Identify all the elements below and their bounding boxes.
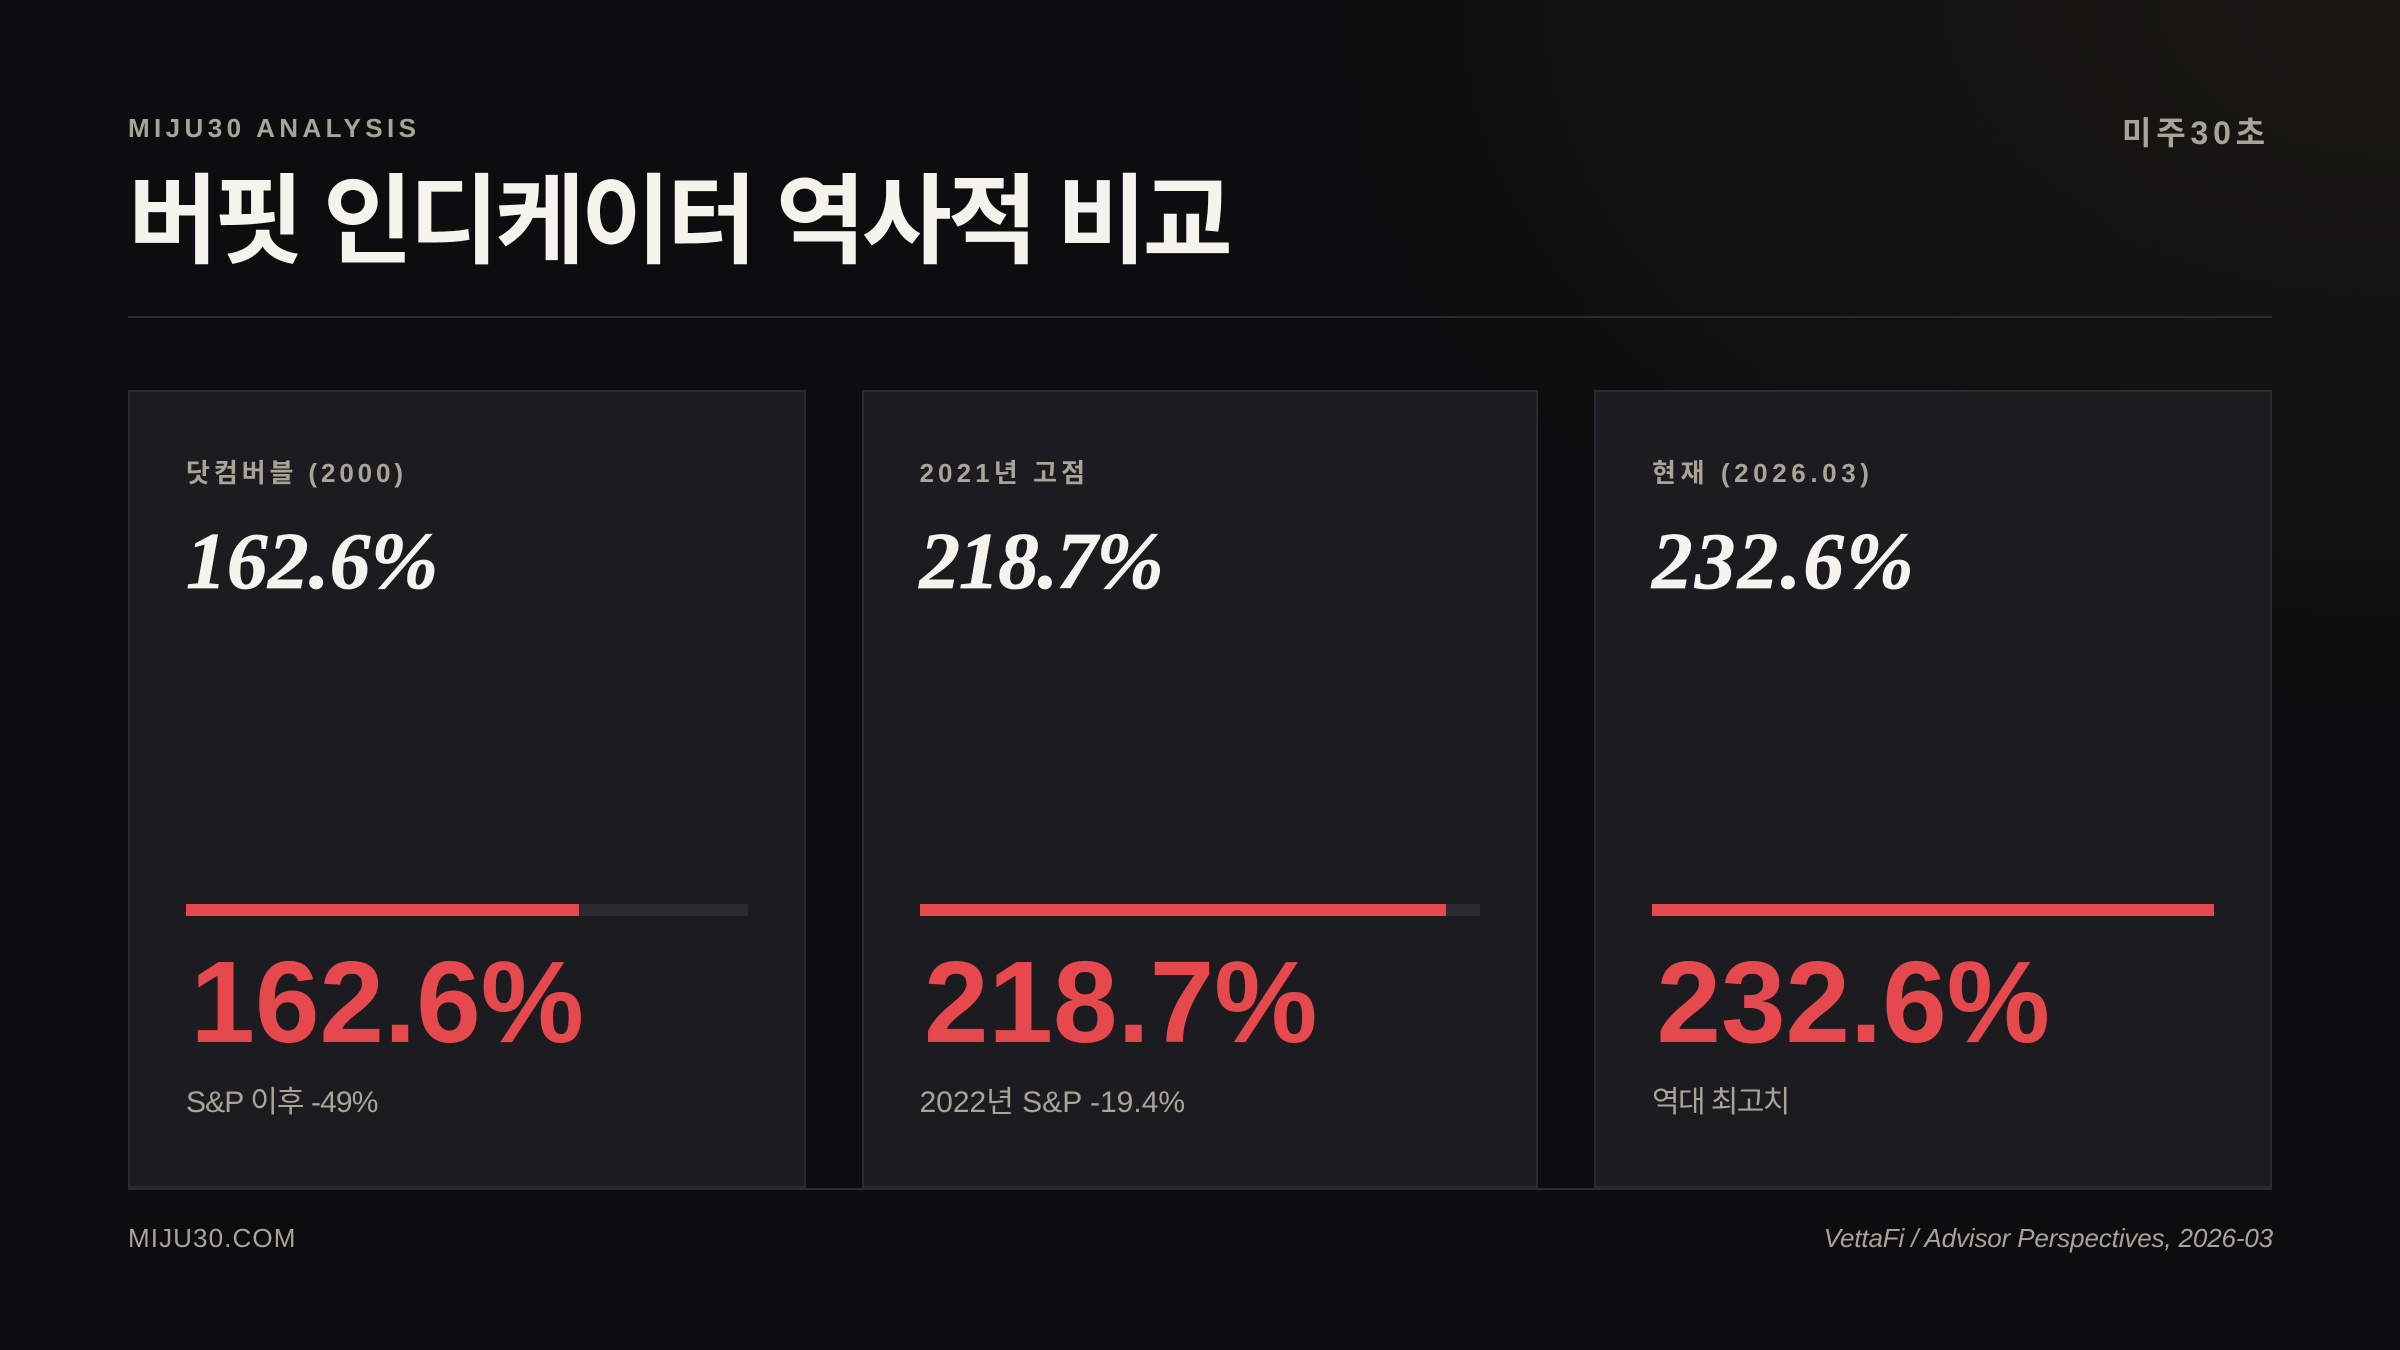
bar: 162.6% bbox=[186, 904, 748, 916]
serif value: 232.6% bbox=[1652, 516, 1916, 606]
large value: 162.6% bbox=[190, 937, 584, 1067]
card label: 현재 (2026.03) bbox=[1652, 458, 1874, 488]
bar: 232.6% bbox=[1652, 904, 2214, 916]
eyebrow: MIJU30 ANALYSIS bbox=[128, 113, 420, 143]
panel: dot-com bubble bbox=[128, 390, 806, 1188]
brand: 미주30초 bbox=[2122, 115, 2270, 151]
footer source: VettaFi / Advisor Perspectives, 2026-03 bbox=[1824, 1223, 2273, 1253]
footer rule bbox=[128, 1188, 2272, 1190]
note: 역대 최고치 bbox=[1652, 1086, 1789, 1119]
panel: 2021 peak bbox=[862, 390, 1538, 1188]
note: 2022년 S&P -19.4% bbox=[920, 1086, 1185, 1119]
card label: 2021년 고점 bbox=[920, 458, 1089, 488]
large value: 232.6% bbox=[1656, 937, 2050, 1067]
header rule bbox=[128, 316, 2272, 318]
large value: 218.7% bbox=[924, 937, 1317, 1067]
footer site: MIJU30.COM bbox=[128, 1223, 296, 1253]
card label: 닷컴버블 (2000) bbox=[186, 458, 407, 488]
note: S&P 이후 -49% bbox=[186, 1086, 378, 1119]
panel: current bbox=[1594, 390, 2272, 1188]
title: 버핏 인디케이터 역사적 비교 bbox=[128, 166, 1229, 276]
serif value: 218.7% bbox=[920, 516, 1163, 606]
bar: 218.7% bbox=[920, 904, 1480, 916]
serif value: 162.6% bbox=[186, 516, 439, 606]
